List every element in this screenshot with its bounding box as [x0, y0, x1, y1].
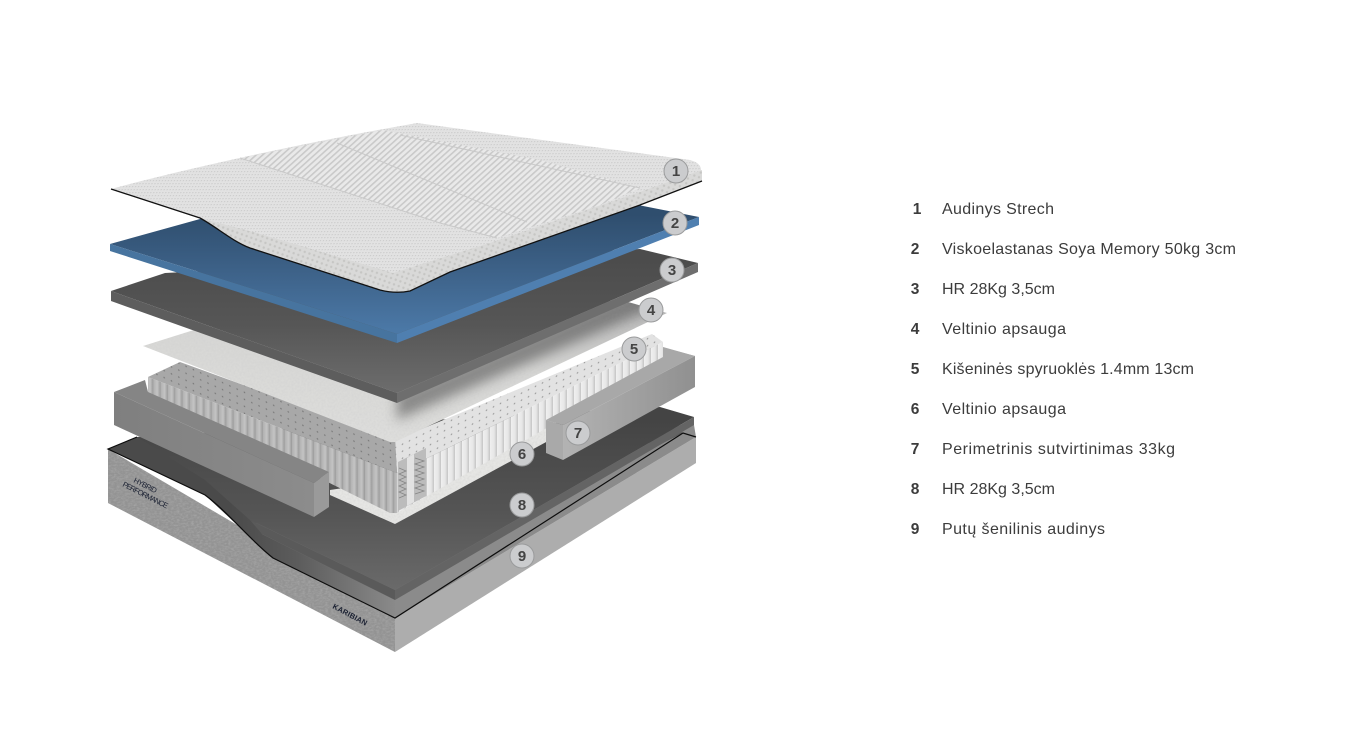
- badge 4: [639, 298, 663, 322]
- layer 6: lower felt pad: [330, 420, 548, 524]
- badge 9: [510, 544, 534, 568]
- layer 4: upper felt pad: [143, 301, 667, 442]
- legend item 5: 5: [911, 361, 920, 378]
- legend item 2: 2: [911, 241, 919, 258]
- legend item 9: Putų šenilinis audinys: [942, 521, 1105, 538]
- badge 9: 9: [518, 548, 526, 565]
- badge 2: [663, 211, 687, 235]
- badge 8: 8: [518, 497, 526, 514]
- layer 7 front-right: perimeter foam right bar: [546, 348, 695, 460]
- legend: [911, 201, 1236, 538]
- badge 3: [660, 258, 684, 282]
- layer 8: HR foam base: [137, 407, 694, 600]
- legend item 1: Audinys Strech: [942, 201, 1054, 218]
- legend item 8: 8: [911, 481, 920, 498]
- layer 1: stretch fabric top: [111, 123, 702, 292]
- legend item 4: 4: [911, 321, 920, 338]
- badge 4: 4: [647, 302, 656, 319]
- legend item 1: 1: [913, 201, 922, 218]
- badge 7: 7: [574, 425, 582, 442]
- brand text: hybrid performance: HYBRID: [132, 476, 159, 495]
- right row of springs: [397, 342, 663, 513]
- badge 5: 5: [630, 341, 638, 358]
- layer 9: chenille foam cover: [108, 425, 696, 652]
- legend item 6: Veltinio apsauga: [942, 401, 1066, 418]
- legend item 9: 9: [911, 521, 920, 538]
- legend item 3: 3: [911, 281, 920, 298]
- legend item 7: 7: [911, 441, 919, 458]
- exposed coils: [398, 448, 426, 511]
- left row of springs: [148, 377, 397, 513]
- legend item 2: Viskoelastanas Soya Memory 50kg 3cm: [942, 241, 1236, 258]
- layer 7 front-left: perimeter foam left bar: [114, 380, 329, 517]
- legend item 5: Kišeninės spyruoklės 1.4mm 13cm: [942, 361, 1194, 378]
- badge 2: 2: [671, 215, 679, 232]
- badge 5: [622, 337, 646, 361]
- legend item 3: HR 28Kg 3,5cm: [942, 281, 1055, 298]
- quilt seams: [240, 135, 640, 238]
- badge 6: [510, 442, 534, 466]
- black piping: [111, 181, 702, 292]
- legend item 8: HR 28Kg 3,5cm: [942, 481, 1055, 498]
- badge 1: 1: [672, 163, 680, 180]
- badge 6: 6: [518, 446, 526, 463]
- legend item 7: Perimetrinis sutvirtinimas 33kg: [942, 441, 1175, 458]
- legend item 4: Veltinio apsauga: [942, 321, 1066, 338]
- coarse quilted centre: [240, 130, 640, 238]
- layer 5: pocket springs: [148, 334, 663, 513]
- badge 7: [566, 421, 590, 445]
- legend item 6: 6: [911, 401, 920, 418]
- layer 3: HR foam: [111, 249, 698, 403]
- brand text: hybrid performance: PERFORMANCE: [121, 480, 170, 510]
- layer 2: viscoelastic memory foam: [110, 205, 699, 343]
- front edge strip: [200, 170, 702, 292]
- number badges on mattress: [510, 159, 688, 568]
- brand text: Karibian: KARIBIAN: [331, 602, 369, 628]
- spring tops: [148, 362, 397, 473]
- badge 8: [510, 493, 534, 517]
- layer 7 rear: perimeter foam far side: [640, 345, 695, 372]
- badge 1: [664, 159, 688, 183]
- badge 3: 3: [668, 262, 676, 279]
